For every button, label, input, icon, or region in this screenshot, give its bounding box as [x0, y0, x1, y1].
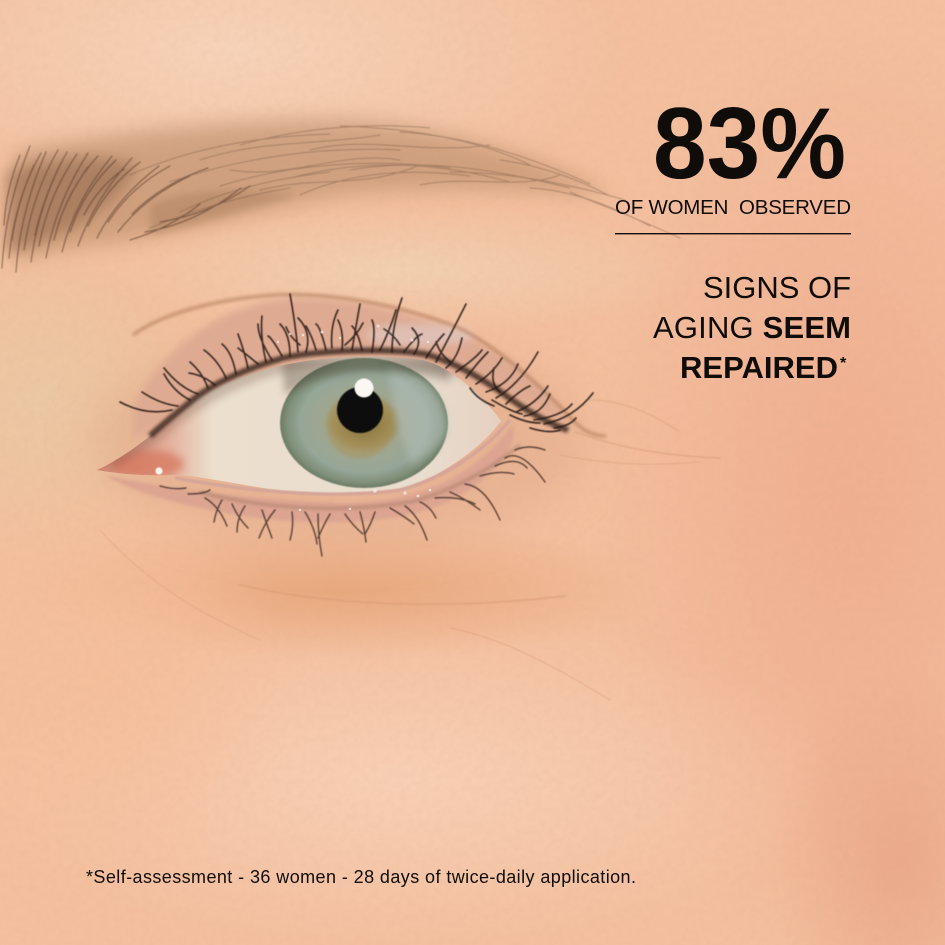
- lower lashes: [160, 447, 545, 556]
- eyeball: [97, 356, 501, 493]
- lower lash band: [200, 445, 520, 508]
- upper lash band: [150, 351, 568, 436]
- caruncle glint: [155, 467, 163, 475]
- eyebrow: [2, 120, 680, 272]
- claim text: SIGNS OF: [703, 270, 851, 305]
- eye socket shadow: [90, 335, 590, 545]
- upper lashes: [120, 294, 593, 432]
- eyelid crease: [133, 295, 606, 436]
- pupil: [337, 387, 383, 433]
- subheading: OF WOMEN OBSERVED: [615, 196, 851, 219]
- claim text: [653, 270, 851, 385]
- waterline: [175, 420, 510, 494]
- iris: [280, 358, 450, 488]
- upper eyelid: [133, 298, 575, 440]
- eye: [90, 294, 606, 556]
- footnote: *Self-assessment - 36 women - 28 days of twice-daily application.: [86, 867, 636, 887]
- lash glints: [277, 324, 431, 511]
- wrinkle lines: [100, 400, 720, 700]
- claim text: REPAIRED: [680, 350, 838, 385]
- divider: [615, 233, 851, 234]
- claim text: AGING SEEM: [653, 310, 851, 345]
- lower eyelid rim: [105, 425, 514, 522]
- catchlight: [354, 378, 374, 398]
- headline statistic: 83%: [653, 88, 846, 200]
- claim text: *: [840, 355, 847, 372]
